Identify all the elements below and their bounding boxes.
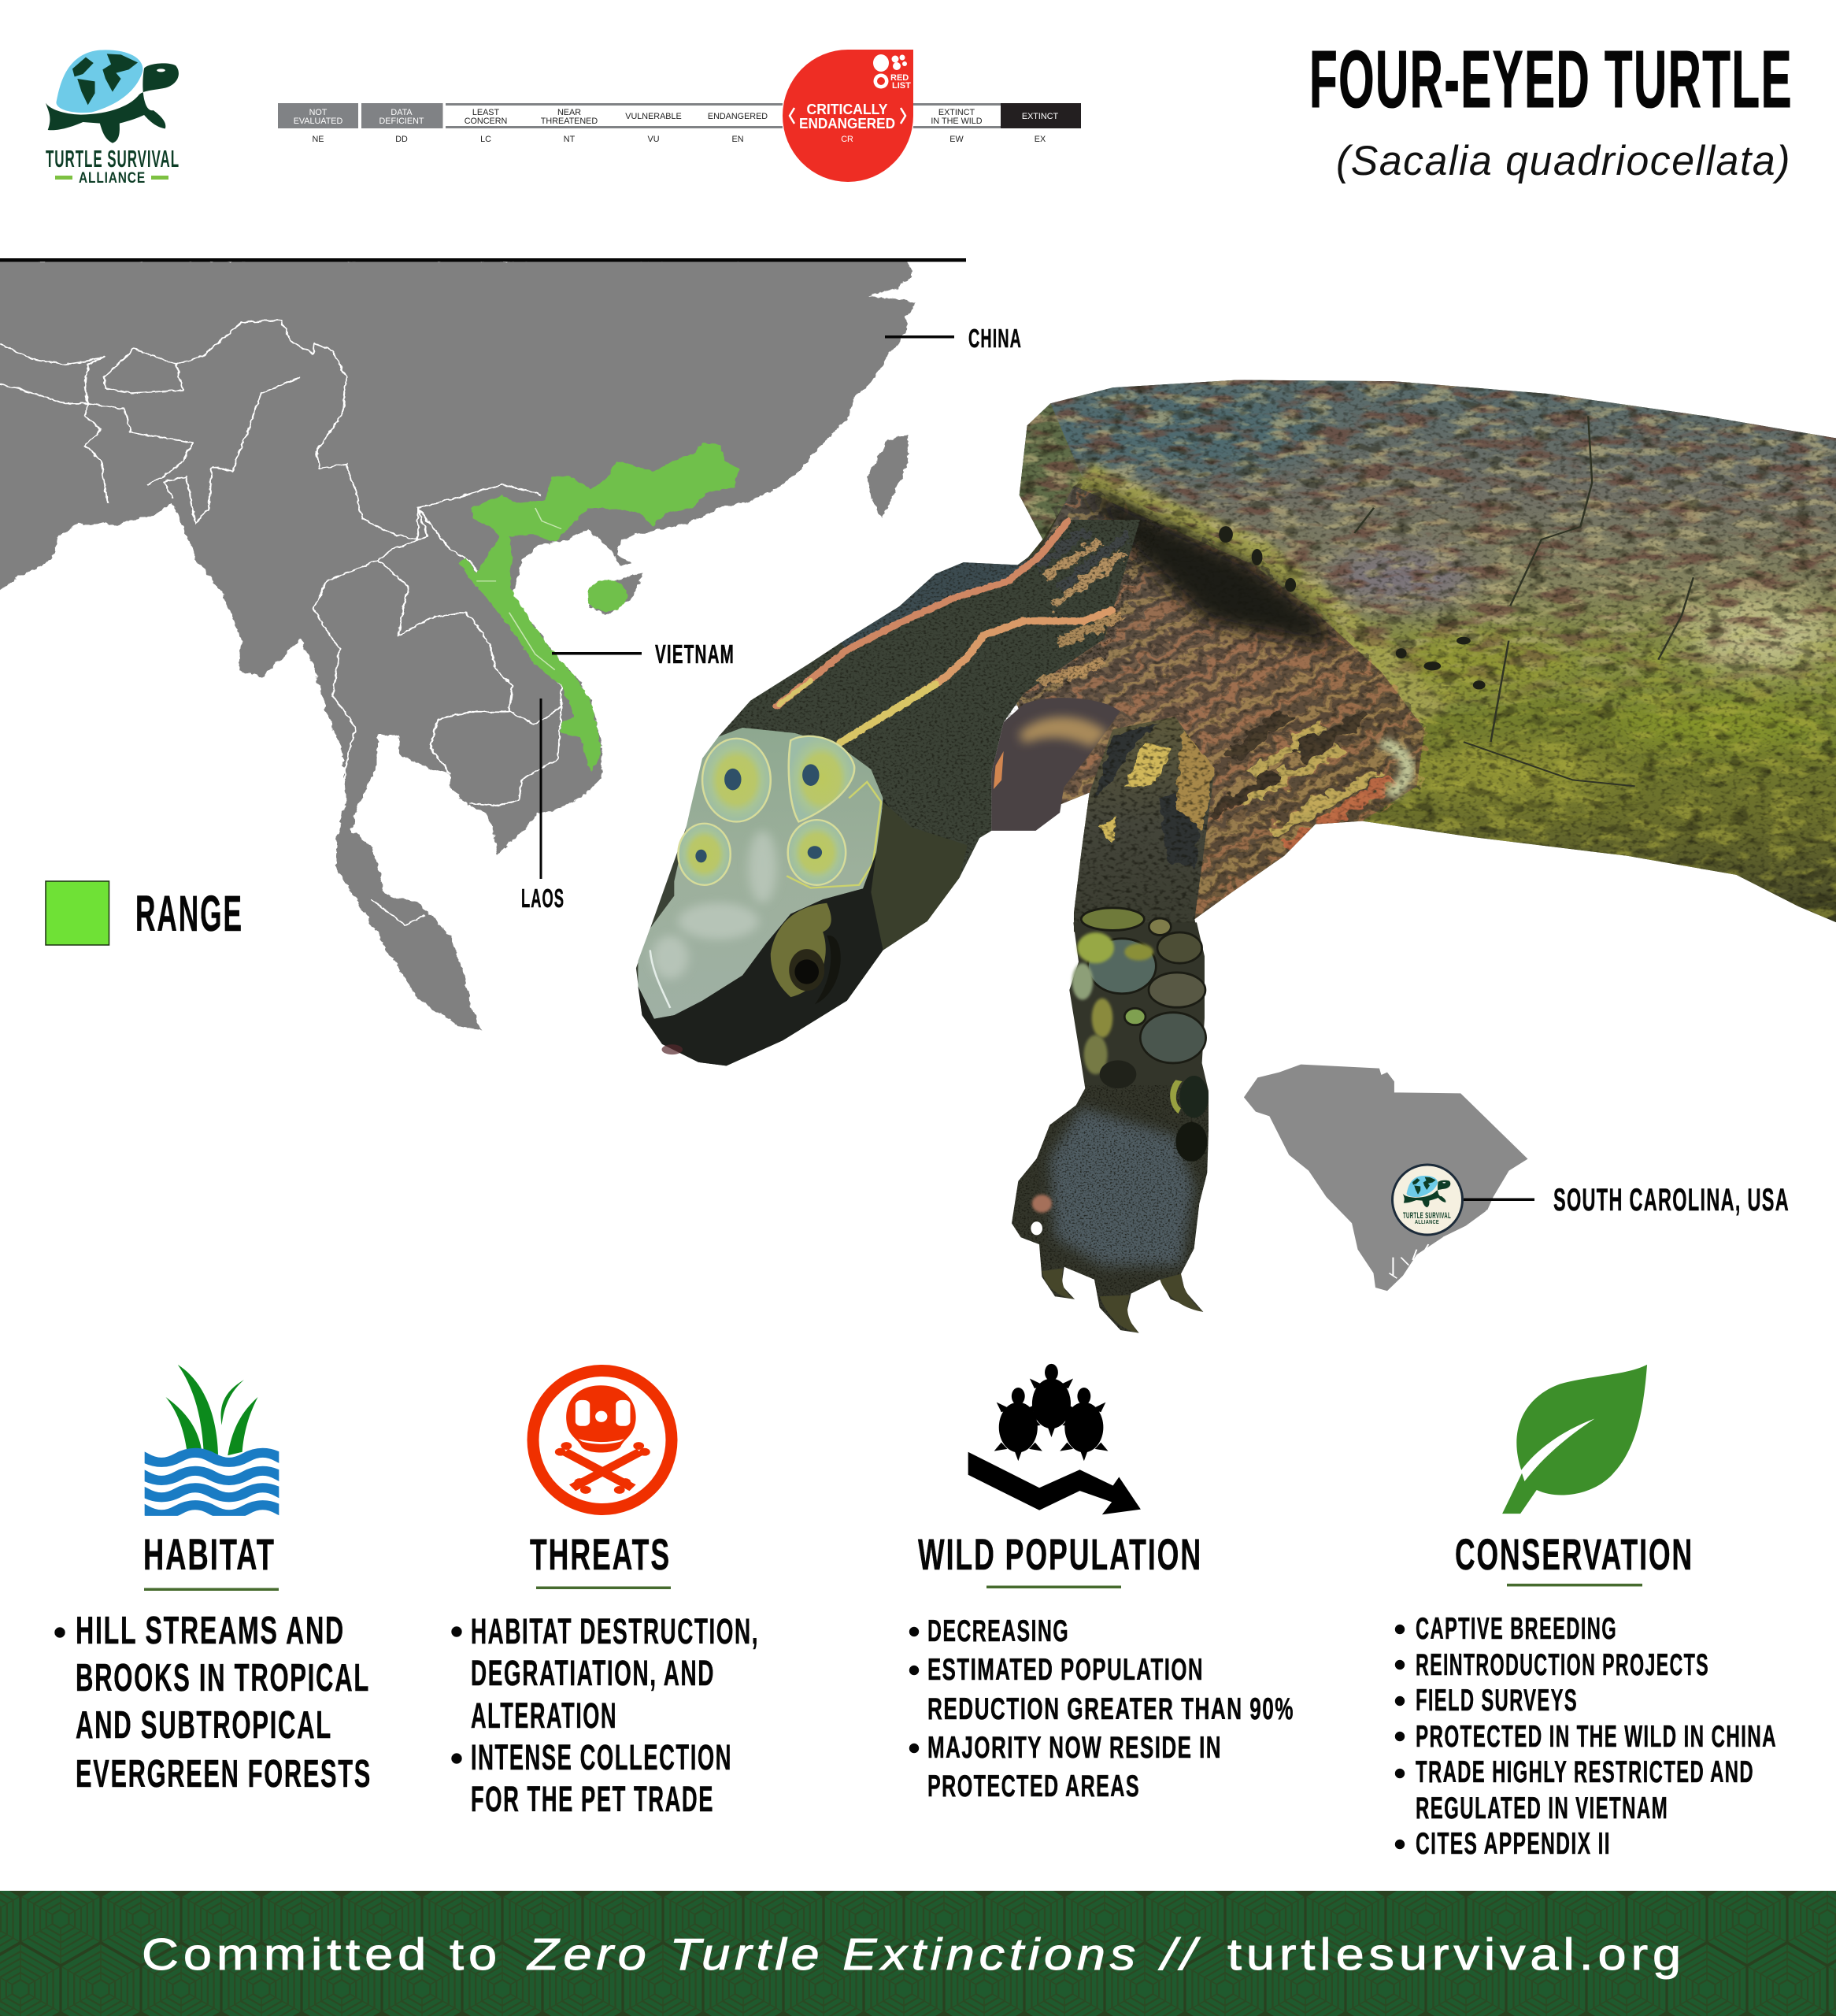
limb mottling (1072, 932, 1209, 1162)
status labels: EXTINCT (1022, 112, 1058, 121)
wild population text: DECREASING (927, 1614, 1069, 1648)
badge: Turtle Survival Alliance: TURTLE SURVIVAL (1403, 1211, 1451, 1221)
status labels: ENDANGERED (708, 112, 768, 121)
status labels: NOT (309, 108, 328, 117)
status labels: LC (480, 135, 491, 144)
habitat text: EVERGREEN FORESTS (76, 1753, 372, 1796)
panel: threats (452, 1370, 759, 1819)
green range area (458, 443, 739, 772)
icon: turtles over falling arrow (968, 1364, 1141, 1514)
eye (771, 903, 841, 1004)
status labels: DATA (391, 108, 413, 117)
callout: Vietnam: VIETNAM (655, 639, 735, 669)
status labels: EX (1035, 135, 1046, 144)
threats text: FOR THE PET TRADE (471, 1779, 714, 1819)
callout: Laos: LAOS (521, 884, 564, 913)
head and neck (636, 520, 1184, 1069)
neck stripes (776, 521, 1112, 742)
jaw and throat (638, 799, 935, 1065)
status cells (278, 103, 1081, 128)
callout: China (885, 324, 1022, 353)
leg shape (1074, 717, 1214, 932)
habitat text (55, 1610, 372, 1796)
status labels: CONCERN (465, 117, 507, 126)
panel: habitat (55, 1365, 372, 1796)
conservation text (1395, 1612, 1777, 1861)
footer banner (0, 1891, 1836, 2016)
IUCN red list status scale (278, 50, 1081, 182)
state shape (1244, 1065, 1527, 1291)
badge: Turtle Survival Alliance (1392, 1165, 1463, 1235)
status labels (294, 108, 1058, 144)
status labels: EW (949, 135, 964, 144)
habitat text: AND SUBTROPICAL (76, 1704, 332, 1747)
foot silhouette (1012, 922, 1209, 1333)
status labels: VULNERABLE (625, 112, 682, 121)
country borders (0, 320, 561, 926)
icon: red list logo (873, 54, 911, 91)
critically endangered marker: CR (841, 135, 853, 144)
status labels: THREATENED (541, 117, 598, 126)
callout: China: CHINA (968, 324, 1022, 353)
status labels: VU (647, 135, 660, 144)
front upper leg (1074, 717, 1215, 932)
panel: wild population (909, 1364, 1294, 1803)
limb scales (1081, 908, 1206, 1063)
wild population text: MAJORITY NOW RESIDE IN (927, 1731, 1222, 1765)
conservation text: CAPTIVE BREEDING (1416, 1612, 1617, 1646)
icon: water and reeds (111, 1365, 313, 1514)
status labels: DD (395, 135, 408, 144)
critically endangered marker: ENDANGERED (799, 116, 895, 132)
scute seams and rim spots (1219, 416, 1693, 786)
neck skin (636, 520, 1140, 1065)
status labels: EN (732, 135, 743, 144)
claw shading (1042, 1269, 1203, 1333)
icon: skull and crossbones (533, 1370, 672, 1509)
scientific name: (Sacalia quadriocellata) (1336, 138, 1791, 184)
heading: wild population: WILD POPULATION (918, 1529, 1202, 1579)
neck side stripes (1036, 531, 1128, 683)
conservation text: CITES APPENDIX II (1416, 1827, 1611, 1861)
wild population text (909, 1614, 1294, 1803)
wild population text: REDUCTION GREATER THAN 90% (927, 1692, 1294, 1726)
conservation text: REGULATED IN VIETNAM (1416, 1792, 1668, 1825)
heading: conservation: CONSERVATION (1455, 1529, 1693, 1579)
head plate (638, 728, 883, 1019)
footer text: turtlesurvival.org (1227, 1929, 1686, 1980)
habitat text: BROOKS IN TROPICAL (76, 1657, 370, 1699)
status labels: NEAR (557, 108, 581, 117)
land mass and islands (0, 261, 917, 1030)
status labels: NT (564, 135, 576, 144)
wild population text: PROTECTED AREAS (927, 1770, 1140, 1803)
threats text: HABITAT DESTRUCTION, (471, 1611, 759, 1651)
shoulder bulb (991, 698, 1120, 831)
footer text: Zero Turtle Extinctions (526, 1929, 1140, 1980)
icon: leaf (1502, 1365, 1647, 1514)
neck skin grain (702, 520, 1184, 1069)
callout: Laos (521, 699, 564, 913)
snout highlight (652, 831, 776, 979)
icon: turtle with globe shell (46, 50, 179, 143)
wild population text: ESTIMATED POPULATION (927, 1653, 1204, 1687)
ocellus pupils (695, 764, 822, 862)
icon: red list logo: RED (890, 73, 909, 83)
body grain (1017, 380, 1836, 922)
critically endangered marker (783, 50, 913, 182)
turtle illustration (636, 362, 1836, 1339)
panel: conservation (1395, 1365, 1777, 1861)
ocellus markings (678, 736, 881, 888)
footer text: Committed to (142, 1929, 502, 1980)
threats text: INTENSE COLLECTION (471, 1737, 732, 1777)
threats text: ALTERATION (471, 1695, 617, 1736)
logo sub wordmark: ALLIANCE (79, 170, 146, 187)
heading: habitat: HABITAT (143, 1529, 276, 1579)
status labels: NE (312, 135, 324, 144)
leg markings (1094, 723, 1214, 869)
status labels: LEAST (472, 108, 499, 117)
leg grain (1074, 717, 1213, 932)
habitat text: HILL STREAMS AND (76, 1610, 345, 1652)
threats text (452, 1611, 759, 1819)
status labels: EXTINCT (938, 108, 975, 117)
status labels: DEFICIENT (379, 117, 424, 126)
foot blue-grey skin (1005, 1085, 1215, 1339)
status labels: IN THE WILD (931, 117, 983, 126)
status labels: EVALUATED (294, 117, 342, 126)
range map: Southeast Asia (0, 261, 917, 1030)
critically endangered marker: CRITICALLY (806, 102, 888, 117)
footer text (142, 1929, 1686, 1980)
shell brown and tan mottling (1020, 380, 1836, 717)
callout: South Carolina (1464, 1183, 1790, 1217)
badge: Turtle Survival Alliance: ALLIANCE (1415, 1220, 1439, 1225)
logo wordmark: TURTLE SURVIVAL (46, 145, 180, 172)
turtle body, shell and shoulder (1016, 380, 1836, 932)
neck back ridge (841, 554, 1040, 650)
map: South Carolina (1244, 1065, 1790, 1291)
threats text: DEGRATIATION, AND (471, 1653, 715, 1693)
callout: Vietnam (552, 639, 735, 669)
white gap between toes (1031, 1221, 1042, 1235)
front foot and scales (1005, 908, 1215, 1339)
heading: threats: THREATS (530, 1529, 671, 1579)
map rule (0, 258, 966, 261)
conservation text: FIELD SURVEYS (1416, 1684, 1578, 1718)
legend: range: RANGE (135, 885, 243, 942)
carapace and lower body (1016, 380, 1836, 932)
shoulder skin (980, 483, 1424, 919)
icon: red list logo: LIST (892, 81, 911, 91)
footer text: // (1157, 1929, 1201, 1980)
legend: range (46, 881, 243, 945)
logo green dashes (55, 176, 168, 180)
logo: Turtle Survival Alliance (46, 50, 180, 187)
